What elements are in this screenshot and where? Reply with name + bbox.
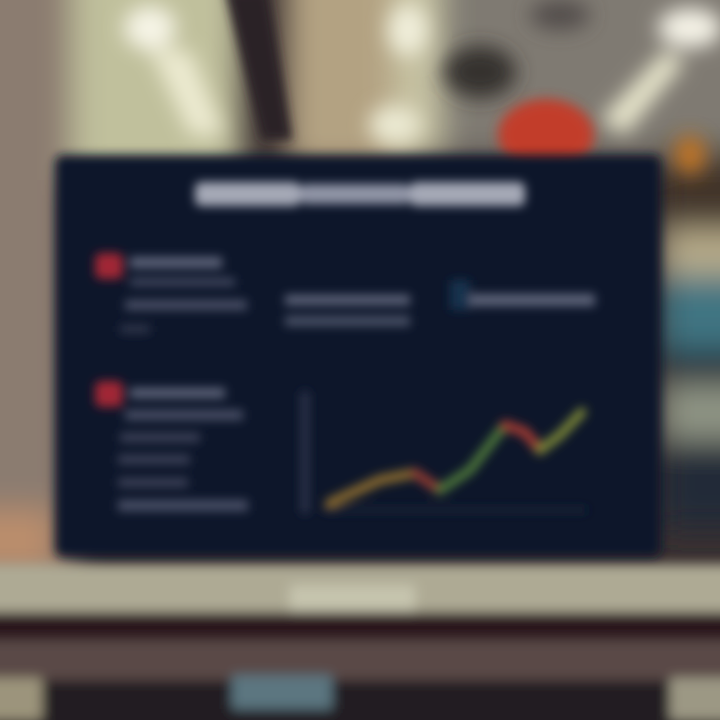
dark strap <box>225 0 292 140</box>
background highlights <box>124 0 720 175</box>
panel: bottom left bullet list <box>95 381 248 511</box>
laptop base <box>0 564 720 720</box>
red ball <box>498 99 594 171</box>
panel: top middle stat <box>285 295 410 326</box>
panel: top right stat <box>450 280 595 310</box>
line chart <box>305 395 585 510</box>
panel: top left bullet list <box>95 253 247 333</box>
laptop screen <box>55 155 661 557</box>
screen title <box>195 182 525 206</box>
